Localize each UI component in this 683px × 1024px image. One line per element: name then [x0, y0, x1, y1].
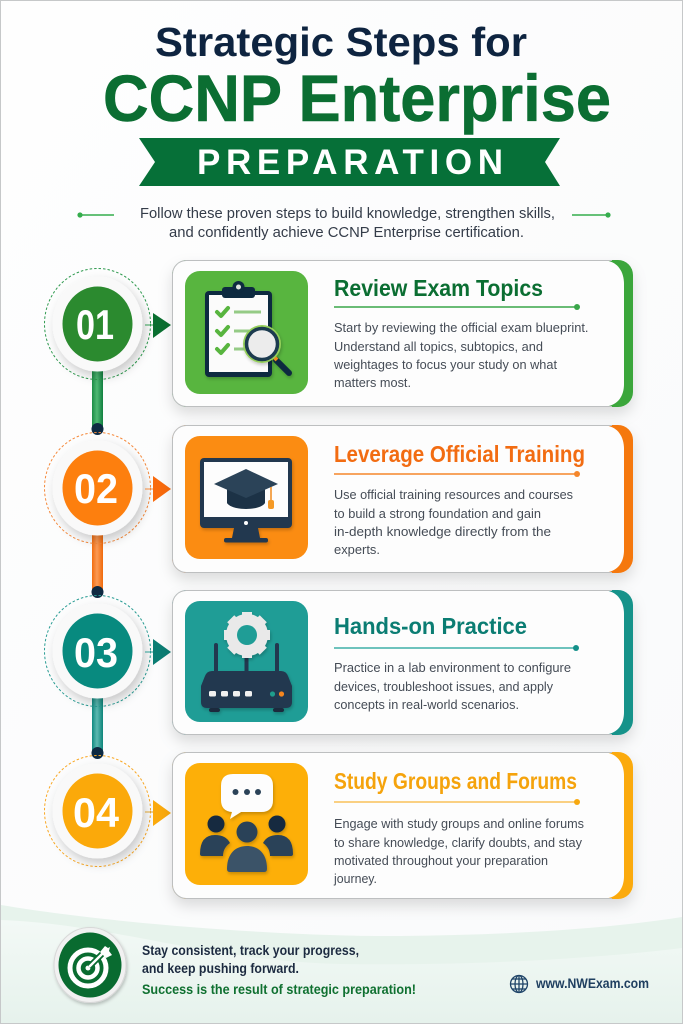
step 02 body text: experts. — [334, 542, 380, 557]
step 04 heading: Study Groups and Forums — [334, 768, 577, 794]
step 02 body text: Use official training resources and courses — [334, 487, 573, 502]
step 02 heading: Leverage Official Training — [334, 441, 585, 467]
step 03 — [44, 590, 633, 735]
step 03 body text: devices, troubleshoot issues, and apply — [334, 679, 553, 694]
icon tile: monitor with graduation cap — [185, 436, 308, 559]
step 03 heading: Hands-on Practice — [334, 613, 527, 639]
step 01 body text: weightages to focus your study on what — [333, 357, 557, 372]
step 03 arrow — [145, 639, 171, 665]
step 04 heading rule — [334, 799, 580, 805]
footer message — [142, 943, 416, 997]
website with globe icon: www.NWExam.com — [535, 976, 649, 991]
timeline connector 1 — [92, 368, 104, 435]
step 02 card — [172, 425, 633, 573]
step 01 heading rule — [334, 304, 580, 310]
timeline connector 2 — [92, 532, 104, 598]
step 02 — [44, 425, 633, 573]
icon tile: group with speech bubble — [185, 763, 308, 885]
step 02 body text — [334, 487, 573, 557]
website with globe icon — [510, 976, 649, 992]
step 03 number badge: 03 — [74, 629, 118, 676]
intro text: and confidently achieve CCNP Enterprise certification. — [169, 225, 524, 241]
step 04 card — [172, 752, 633, 899]
step 03 number badge — [44, 596, 150, 706]
step 01 body text — [333, 320, 588, 390]
step 03 body text — [334, 660, 571, 712]
step 01 body text: Start by reviewing the official exam blueprint. — [334, 320, 588, 335]
ribbon banner: preparation — [139, 138, 560, 186]
step 04 arrow — [145, 800, 171, 826]
step 01 body text: Understand all topics, subtopics, and — [334, 339, 543, 354]
step 01 arrow — [145, 313, 171, 338]
step 04 body text: Engage with study groups and online forums — [334, 816, 584, 831]
icon tile: clipboard and magnifier — [185, 271, 308, 394]
step 03 heading rule — [334, 645, 579, 651]
step 04 number badge: 04 — [73, 789, 120, 836]
footer wave background — [1, 905, 682, 1023]
icon tile: router with gear — [185, 601, 308, 722]
step 03 body text: Practice in a lab environment to configure — [334, 660, 571, 675]
step 04 number badge — [44, 756, 150, 866]
step 01 body text: matters most. — [334, 375, 411, 390]
step 03 card — [172, 590, 633, 735]
step 04 body text — [333, 816, 584, 886]
footer message: and keep pushing forward. — [142, 961, 299, 976]
title line: CCNP Enterprise: CCNP Enterprise — [103, 61, 611, 135]
step 02 number badge — [44, 432, 150, 544]
step 01 heading: Review Exam Topics — [334, 275, 543, 301]
step 01 card — [172, 260, 633, 407]
footer message: Success is the result of strategic preparation! — [142, 982, 416, 997]
step 01 — [44, 260, 633, 407]
intro text — [140, 206, 555, 241]
step 02 heading rule — [334, 471, 580, 477]
step 01 number badge: 01 — [76, 301, 114, 348]
step 02 body text: to build a strong foundation and gain — [334, 506, 541, 521]
step 02 number badge: 02 — [74, 465, 118, 512]
title — [103, 19, 611, 135]
footer — [54, 928, 649, 1002]
intro text: Follow these proven steps to build knowledge, strengthen skills, — [140, 206, 555, 222]
step 01 number badge — [44, 268, 150, 380]
step 03 body text: concepts in real-world scenarios. — [334, 697, 519, 712]
step 02 arrow — [145, 476, 171, 502]
ribbon banner: preparation: PREPARATION — [197, 143, 503, 182]
step 02 body text: in-depth knowledge directly from the — [334, 524, 551, 539]
step 04 body text: journey. — [333, 871, 377, 886]
step 04 — [44, 752, 633, 899]
step 04 body text: motivated throughout your preparation — [334, 853, 548, 868]
step 04 body text: to share knowledge, clarify doubts, and stay — [334, 835, 582, 850]
icon: target with arrow — [54, 928, 126, 1002]
title line: Strategic Steps for: Strategic Steps for — [155, 19, 527, 65]
timeline connector 3 — [92, 695, 104, 759]
footer message: Stay consistent, track your progress, — [142, 943, 359, 958]
